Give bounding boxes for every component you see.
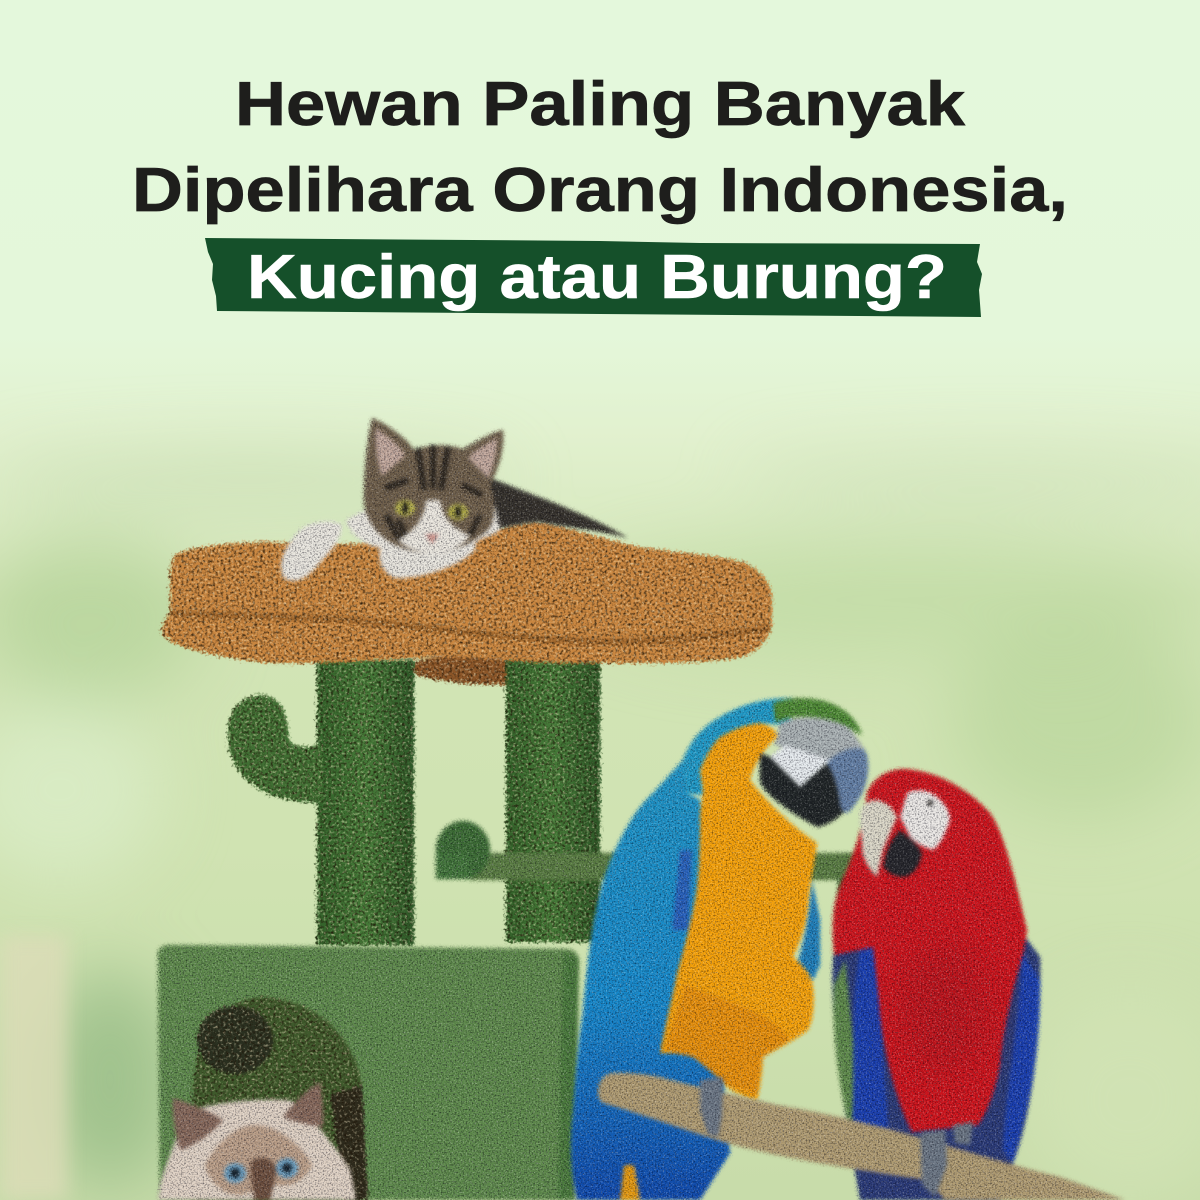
cat muzzle [398,500,470,553]
title [132,70,1068,225]
side branch [436,821,870,938]
macaw neck blue [683,698,793,795]
ragdoll eyes [224,1158,298,1183]
top tabby cat [281,418,628,581]
orange bed [162,522,772,663]
house box [158,945,579,1200]
red macaw eye [927,800,933,806]
front cactus post [317,660,414,945]
red macaw back wings [833,930,1040,1200]
perch [598,1073,1125,1200]
house opening [190,997,368,1200]
macaw yellow chest [660,723,817,1100]
cat paw [281,521,342,581]
ragdoll mask [250,1158,276,1200]
macaw wing dark feather [672,850,692,930]
red macaw blue left wing [852,947,888,1130]
cat eyes [395,500,468,520]
cat head [364,418,503,553]
red macaw green wing edge [834,960,860,1130]
bottom ragdoll cat [158,1082,356,1200]
macaw wing and tail [571,760,730,1200]
highlighted subtitle banner: Kucing atau Burung? [247,243,947,312]
red macaw blue right wing [1003,953,1040,1163]
rear post [506,660,600,942]
macaw white cheek [770,745,830,787]
claws [700,1077,973,1197]
red macaw lower beak [883,830,922,877]
red macaw upper beak [860,800,897,877]
macaw beak [827,748,868,813]
red macaw [833,769,1040,1200]
bed underside [410,651,600,685]
red macaw face patch [900,790,950,850]
ragdoll ears [173,1098,223,1150]
macaw green crown [773,698,862,735]
cat ears inner [376,428,497,478]
macaw dark throat [760,753,850,827]
macaw tail yellow tip [620,1165,640,1200]
macaw chest darker lower [665,985,790,1095]
cat chest [346,505,500,578]
cat tree [158,522,870,1200]
cactus arm [228,695,322,802]
title: Dipelihara Orang Indonesia, [132,156,1068,225]
blue-and-gold macaw [571,698,868,1200]
title: Hewan Paling Banyak [235,70,966,139]
cat markings [385,445,482,545]
ragdoll cheek tint [205,1125,312,1195]
cat body [470,478,628,538]
macaw face stripes [775,717,865,765]
red macaw dark chest shading [900,945,990,1075]
red macaw body [833,769,1027,1132]
cat nose [425,534,439,544]
macaw right wing edge [797,880,820,980]
